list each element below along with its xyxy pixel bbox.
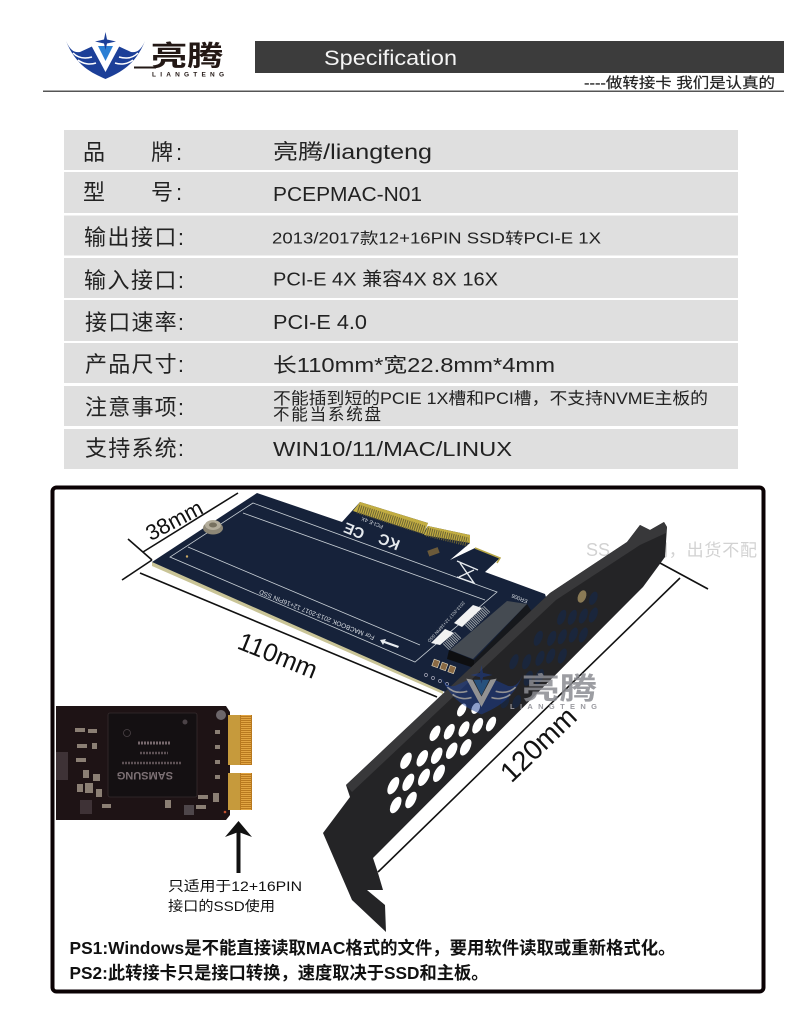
faded watermark note: 明，出货不配 [651,541,757,560]
header logo: 亮腾 [151,40,223,72]
vent holes: dark [499,590,600,710]
header logo [66,32,224,79]
row: product size: 长110mm*宽22.8mm*4mm [273,354,555,377]
row: notes [64,386,738,426]
gold fingers [353,502,500,563]
dimension: 120mm line [378,563,708,872]
dimension: 110mm [140,573,437,697]
certification marks: KC [376,529,403,553]
board body [152,493,560,692]
board edge [152,562,443,694]
adapter circuit board: ER006 [511,592,529,604]
mounting screw [203,520,223,534]
row: model [64,172,738,213]
product panel frame [52,488,764,992]
row: supported systems: 支持系统: [85,436,184,461]
row: input port: PCI-E 4X 兼容4X 8X 16X [273,268,498,290]
resistors [432,659,456,674]
certification marks: PCI-E 4X [361,515,384,529]
row: interface speed [64,300,738,341]
footnotes: PS1:Windows是不能直接读取MAC格式的文件，要用软件读取或重新格式化。 [70,938,676,958]
certification marks: CE [341,518,367,542]
flash chip: SAMSUNG [117,769,173,781]
adapter circuit board [152,493,560,694]
header logo: LIANGTENG [152,72,224,78]
dimension label: 120mm: 120mm [494,701,583,788]
bracket fold highlight [346,522,667,792]
gold connector upper [228,715,252,765]
row: brand: 亮腾/liangteng [273,141,432,164]
tagline: ----做转接卡 我们是认真的 [584,74,775,92]
row: notes: 不能插到短的PCIE 1X槽和PCI槽，不支持NVME主板的 [273,389,708,408]
row: product size: 产品尺寸: [85,352,184,377]
row: supported systems: WIN10/11/MAC/LINUX [273,439,512,461]
row: interface speed: 接口速率: [85,310,184,335]
bracket face [323,522,667,932]
row: model: 号 [151,180,173,205]
row: interface speed: PCI-E 4.0 [273,312,367,334]
row: supported systems [64,429,738,469]
SSD compatibility caption: 只适用于12+16PIN [168,878,302,894]
SSD bay outline [170,503,497,662]
row: input port: 输入接口: [84,268,184,293]
SMD components [56,710,226,815]
row: output port [64,216,738,256]
footnotes: PS2:此转接卡只是接口转换，速度取决于SSD和主板。 [70,963,488,983]
vent holes: light [385,701,498,815]
row: model: : [176,180,182,205]
dimension: 110mm: 110mm [234,628,321,685]
gold connector lower [228,773,252,810]
row: notes: 注意事项: [85,395,184,420]
row: brand: 品 [83,140,105,165]
M.2 socket [447,601,532,668]
brand watermark over bracket [440,665,597,714]
dimension: 38mm [122,493,238,580]
row: input port [64,258,738,298]
header bar: Specification: Specification [324,47,457,70]
SSD board [56,706,230,820]
board silk text: For MACBOOK 2013-2017 12+16PIN SSD [258,588,376,641]
SSD compatibility caption [168,878,302,914]
row: model: PCEPMAC-N01 [273,184,422,206]
arrow: up to SSD connector [225,821,252,873]
row: brand [64,130,738,170]
faded watermark note: SS [586,540,610,560]
row: notes: 不能当系统盘 [273,405,381,424]
row: product size [64,343,738,383]
row: brand: 牌 [151,140,173,165]
flash chip [108,713,197,797]
certification marks [341,515,478,583]
small capacitor [427,547,440,557]
row: model: 型 [83,180,105,205]
row: brand: : [176,140,182,165]
header bar: Specification [255,41,784,73]
brand watermark over bracket: 亮腾 [522,672,597,706]
dimension: 38mm: 38mm [141,495,207,546]
specification table [64,130,738,469]
footnotes [70,938,676,983]
adapter circuit board: 2013-2017 12+16PIN SSD [426,600,466,644]
silk arrow [380,639,399,648]
connector pads [431,605,487,647]
row: output port: 输出接口: [84,225,184,250]
bracket screw hole [576,589,588,604]
brand watermark over bracket: LIANGTENG [510,702,597,711]
faded watermark note [586,540,757,560]
row: output port: 2013/2017款12+16PIN SSD转PCI-E 1X [272,230,602,248]
SSD compatibility caption: 接口的SSD使用 [168,898,275,914]
SSD photo [56,706,252,820]
metal bracket [323,522,667,932]
